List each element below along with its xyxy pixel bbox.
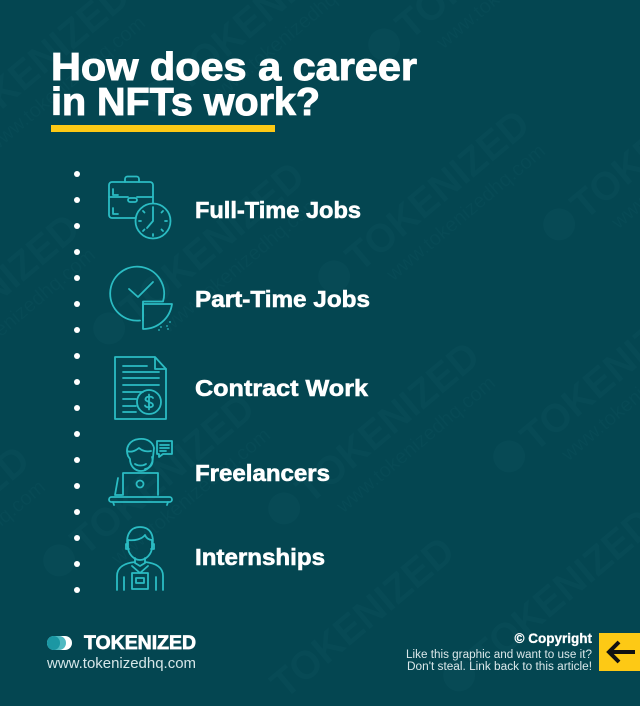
icon: intern with badge [117,527,163,590]
yellow arrow box [599,633,640,671]
watermark pattern: www.tokenizedhq.com [157,192,325,338]
title underline [51,125,275,132]
watermark pattern: TOKENIZED [338,102,538,280]
copyright notice: Don't steal. Link back to this article! [407,661,592,673]
icon: contract document with dollar [115,357,166,419]
watermark pattern: TOKENIZED [288,334,488,512]
icon: freelancer at laptop [109,439,172,505]
icon: tokenized logo mark [47,636,72,650]
icon: briefcase and clock [109,176,170,238]
title [51,46,417,124]
icon: clock with pie slice and check [110,267,172,330]
copyright notice [406,631,592,673]
watermark pattern: TOKENIZED [63,386,263,564]
watermark pattern: www.tokenizedhq.com [107,424,275,570]
label: part-time jobs: Part-Time Jobs [195,286,370,312]
title: How does a career [51,46,417,89]
label: freelancers: Freelancers [195,460,330,486]
footer logo: www.tokenizedhq.com [46,656,196,672]
footer logo [46,633,196,672]
watermark pattern: www.tokenizedhq.com [332,372,500,518]
footer logo: TOKENIZED [84,633,196,654]
title: in NFTs work? [51,81,320,124]
dotted timeline [74,171,80,593]
copyright notice: Like this graphic and want to use it? [406,649,592,661]
watermark pattern: TOKENIZED [113,154,313,332]
copyright notice: © Copyright [515,631,592,646]
watermark pattern: TOKENIZED [263,529,463,706]
label: contract work: Contract Work [195,375,368,401]
label: full-time jobs: Full-Time Jobs [195,197,361,223]
watermark pattern: www.tokenizedhq.com [382,140,550,286]
label: internships: Internships [195,544,325,570]
